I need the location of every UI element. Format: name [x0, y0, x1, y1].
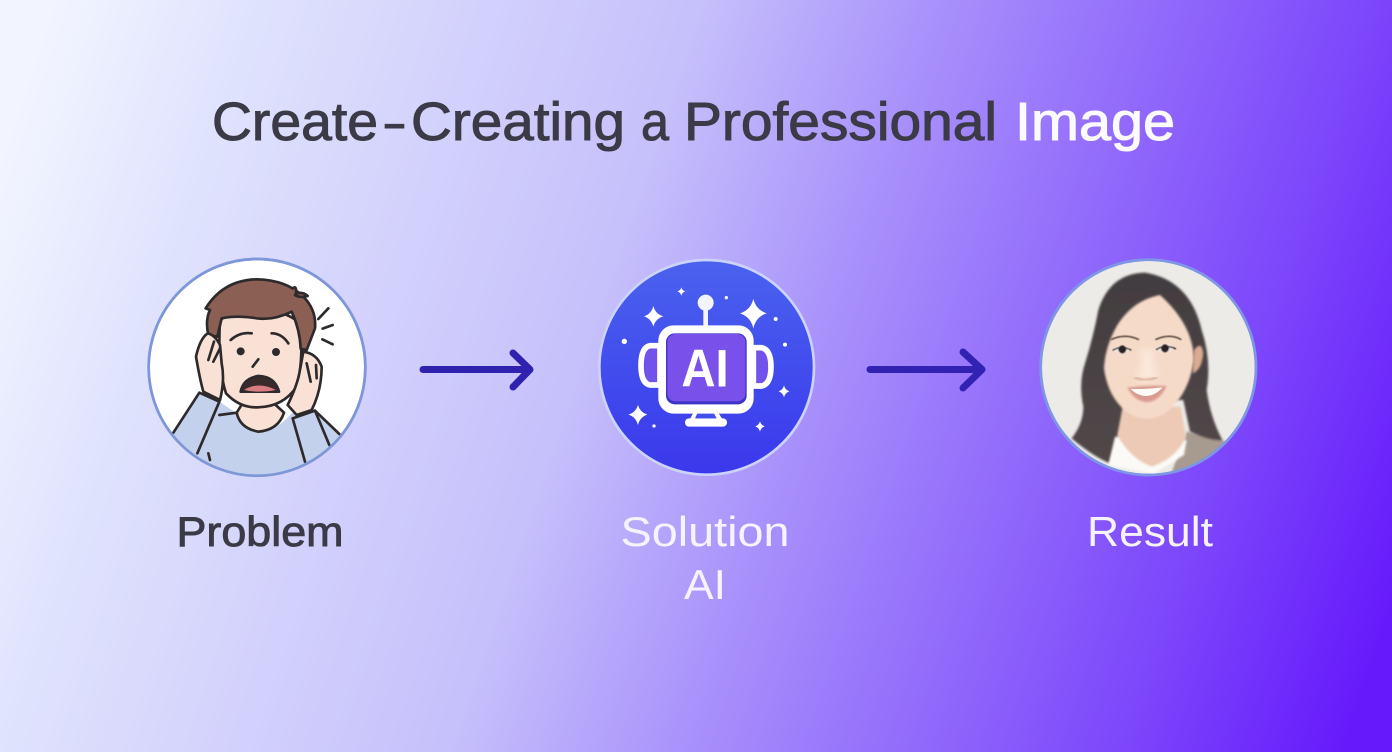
title: Image [1015, 92, 1175, 152]
panel: AI solution icon [599, 260, 814, 475]
icon: sparkles [622, 287, 789, 432]
panel: result portrait [1041, 260, 1256, 483]
label: Result: Result [1087, 508, 1213, 555]
title: Create [212, 92, 378, 152]
title [212, 92, 1175, 152]
panel: problem icon [149, 259, 365, 483]
text: AI: AI [681, 340, 729, 399]
label: Solution AI [620, 508, 790, 608]
title: Professional [684, 92, 997, 152]
label: Solution AI: Solution [620, 508, 790, 555]
title: a [641, 92, 670, 152]
title: Creating [411, 92, 625, 152]
arrow: problem to solution [423, 353, 530, 387]
arrow: solution to result [870, 352, 982, 388]
title: – [385, 92, 404, 152]
label: Solution AI: AI [684, 561, 726, 608]
icon: robot monitor [641, 295, 771, 427]
label: Problem: Problem [176, 508, 344, 555]
